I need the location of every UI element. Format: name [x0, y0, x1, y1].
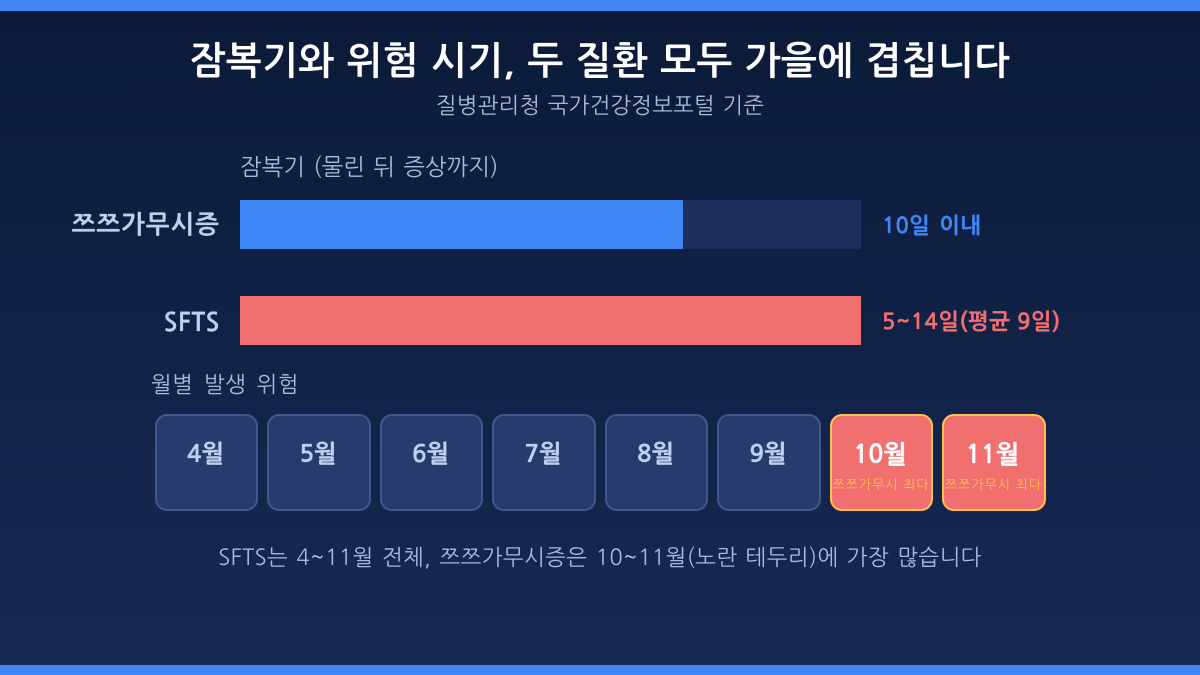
- monthly risk heading: 월별 발생 위험: [151, 374, 299, 396]
- month: May: 5월: [299, 442, 337, 466]
- month: October highlighted: 10월: [853, 442, 907, 467]
- month: June: [380, 414, 483, 511]
- month: May: [267, 414, 371, 511]
- month: November highlighted: [942, 414, 1046, 511]
- month: August: 8월: [637, 442, 674, 466]
- month: October highlighted: 쯔쯔가무시 최다: [832, 478, 930, 491]
- label: scrub typhus: 쯔쯔가무시증: [72, 212, 220, 237]
- month: October highlighted: [830, 414, 933, 511]
- bar: SFTS: [240, 296, 861, 345]
- month: July: [492, 414, 596, 511]
- month: April: 4월: [187, 442, 224, 466]
- bottom accent bar: [0, 665, 1200, 675]
- footnote: SFTS는 4~11월 전체, 쯔쯔가무시증은 10~11월(노란 테두리)에 가장 많습니다: [218, 547, 982, 569]
- bar track: scrub typhus: [240, 200, 861, 249]
- value: SFTS: 5~14일(평균 9일): [882, 311, 1061, 333]
- title: 잠복기와 위험 시기, 두 질환 모두 가을에 겹칩니다: [190, 42, 1010, 80]
- label: SFTS: SFTS: [164, 310, 220, 335]
- subtitle: 질병관리청 국가건강정보포털 기준: [436, 95, 764, 117]
- bar: scrub typhus: [240, 200, 683, 249]
- value: scrub typhus: 10일 이내: [882, 215, 981, 237]
- top accent bar: [0, 0, 1200, 11]
- panel: incubation chart: [72, 156, 1061, 345]
- month: July: 7월: [524, 442, 562, 466]
- month: November highlighted: 11월: [966, 442, 1019, 467]
- month: June: 6월: [412, 442, 449, 466]
- month: November highlighted: 쯔쯔가무시 최다: [945, 478, 1042, 491]
- month: August: [605, 414, 708, 511]
- chart heading: 잠복기 (물린 뒤 증상까지): [240, 156, 498, 179]
- month: September: [717, 414, 821, 511]
- month: April: [155, 414, 258, 511]
- month: September: 9월: [749, 442, 787, 466]
